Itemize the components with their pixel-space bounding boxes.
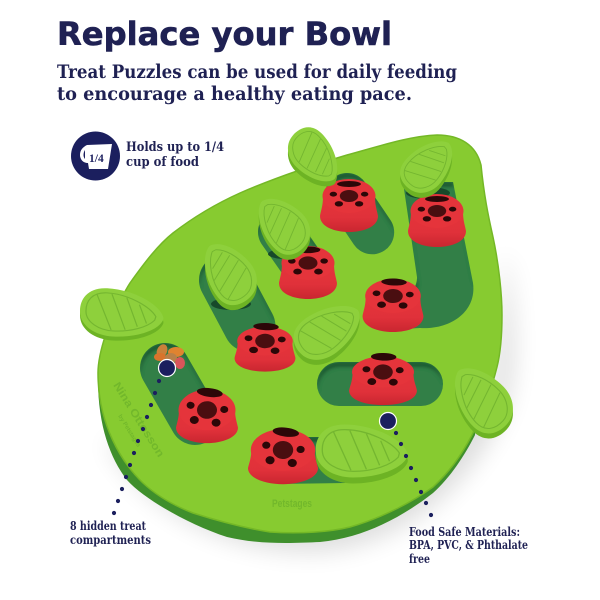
label: food safe materials: free: [409, 552, 430, 566]
subtitle: to encourage a healthy eating pace.: [57, 83, 412, 105]
label: food safe materials: Food Safe Materials:: [409, 525, 520, 539]
embossed brand text: Nina Ottosson: [110, 380, 166, 460]
leaf shadows in compartments: [211, 187, 450, 310]
leaf sliders: [79, 120, 524, 484]
callout: hidden compartments dotted line: [112, 360, 176, 515]
treats: [154, 343, 185, 371]
icon: measuring cup 1/4: [71, 132, 120, 180]
ladybug cups: [176, 179, 466, 484]
label: food safe materials: [409, 525, 528, 566]
label: hidden compartments: 8 hidden treat: [70, 519, 146, 533]
label: capacity: [126, 140, 224, 170]
toy base layer: [98, 380, 480, 543]
icon: measuring cup 1/4: 1/4: [89, 153, 104, 165]
subtitle: Treat Puzzles can be used for daily feeding: [57, 61, 457, 83]
label: hidden compartments: compartments: [70, 533, 151, 547]
title: Replace your Bowl: [57, 15, 392, 53]
callout: food safe dotted line: [380, 412, 433, 517]
treat compartments: [131, 164, 473, 484]
label: capacity: cup of food: [126, 155, 199, 170]
embossed brand text: by Petstages: [116, 414, 141, 449]
toy top surface: [98, 135, 502, 533]
soft shadow: [105, 250, 514, 552]
label: hidden compartments: [70, 519, 151, 547]
embossed brand text: [110, 380, 312, 510]
subtitle: [57, 61, 457, 105]
label: capacity: Holds up to 1/4: [126, 140, 224, 155]
puzzle toy: [79, 120, 524, 552]
label: food safe materials: BPA, PVC, & Phthalate: [409, 538, 528, 552]
embossed brand text: Petstages: [272, 498, 312, 510]
